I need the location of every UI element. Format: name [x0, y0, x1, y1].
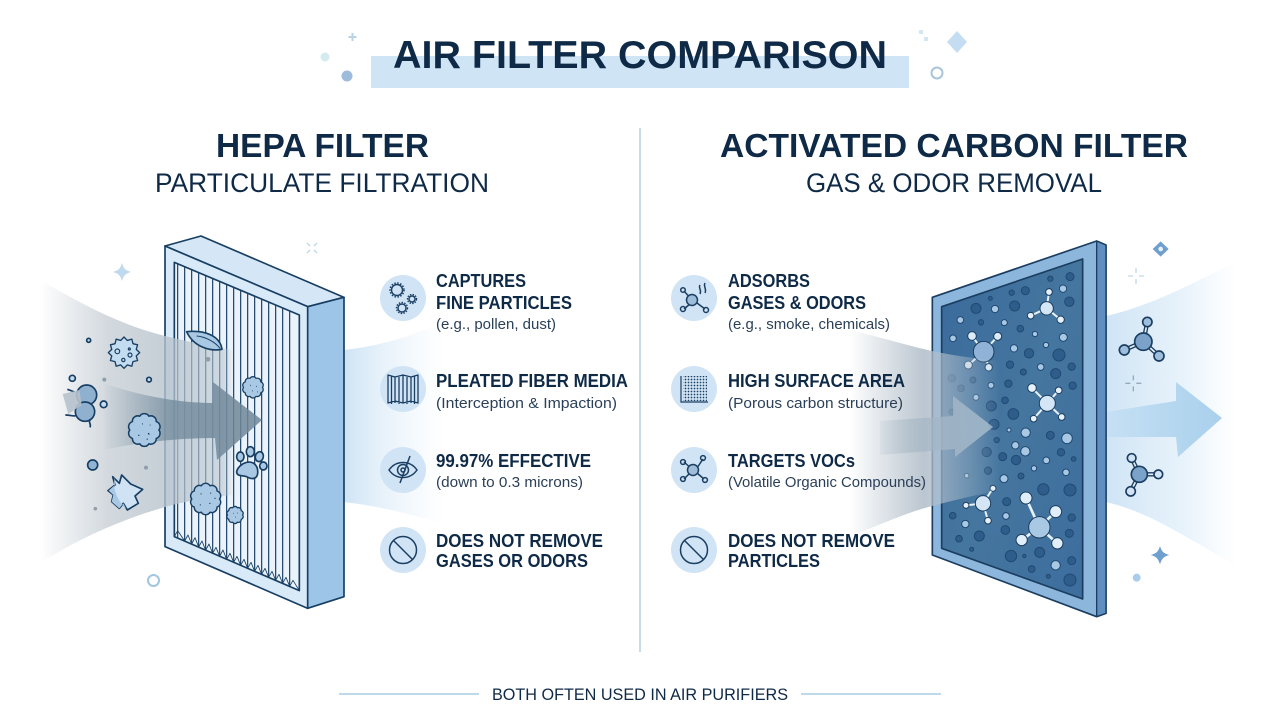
- left feature list: [380, 270, 628, 573]
- free molecules and sparkles: [1119, 241, 1169, 582]
- icon: small dots: [69, 338, 210, 510]
- left column heading: PARTICULATE FILTRATION: [155, 168, 489, 198]
- feature: captures fine particles: (e.g., pollen, dust): [436, 316, 556, 333]
- feature: adsorbs gases: (e.g., smoke, chemicals): [728, 316, 890, 333]
- feature: pleated fiber media: [380, 366, 628, 412]
- feature: high surface area: [671, 366, 905, 412]
- feature: adsorbs gases: ADSORBS: [728, 270, 810, 291]
- feature: pleated fiber media: PLEATED FIBER MEDIA: [436, 370, 628, 391]
- decorative sparkles: [1125, 241, 1169, 582]
- light pores: [950, 285, 1072, 570]
- feature: does not remove gases: DOES NOT REMOVE: [436, 530, 603, 551]
- feature: captures fine particles: FINE PARTICLES: [436, 292, 572, 313]
- feature: 99.97% effective: (down to 0.3 microns): [436, 474, 583, 491]
- title decorations: [320, 30, 967, 82]
- icon: dust speck: [227, 506, 243, 524]
- incoming air stream: [850, 330, 1000, 536]
- feature: does not remove particles: [671, 527, 895, 573]
- feature: pleated fiber media: (Interception & Impaction): [436, 395, 617, 412]
- feature: does not remove particles: DOES NOT REMOVE: [728, 530, 895, 551]
- icon: leaf: [187, 331, 222, 350]
- trapped molecules: [963, 289, 1065, 549]
- feature: high surface area: HIGH SURFACE AREA: [728, 370, 905, 391]
- left column heading: [155, 128, 489, 198]
- clean air outflow: [344, 320, 445, 525]
- feature: targets VOCs: (Volatile Organic Compounds): [728, 474, 926, 491]
- icon: dust cloud: [129, 414, 160, 446]
- feature: captures fine particles: [380, 270, 572, 333]
- title highlight bar: [371, 56, 909, 88]
- decorative sparkle and ring: [113, 243, 317, 586]
- icon: pollen grain: [108, 337, 140, 368]
- feature: targets VOCs: TARGETS VOCs: [728, 450, 855, 471]
- icon: mold clump: [63, 385, 97, 427]
- right column heading: [720, 128, 1188, 198]
- left column heading: HEPA FILTER: [216, 128, 429, 165]
- feature: adsorbs gases: [671, 270, 890, 333]
- feature: captures fine particles: CAPTURES: [436, 270, 526, 291]
- clean air outflow: [1106, 262, 1235, 565]
- center divider: [639, 128, 641, 652]
- icon: pet paw: [237, 447, 267, 479]
- flow arrow: [103, 382, 262, 460]
- feature: 99.97% effective: 99.97% EFFECTIVE: [436, 450, 591, 471]
- molecule: top: [1119, 317, 1164, 361]
- icon: fiber shard: [108, 475, 143, 510]
- feature: adsorbs gases: GASES & ODORS: [728, 292, 866, 313]
- right feature list: [671, 270, 926, 573]
- right column heading: GAS & ODOR REMOVAL: [806, 168, 1102, 198]
- icon: dust cloud lower: [191, 483, 221, 515]
- activated carbon illustration: [850, 241, 1235, 617]
- particles: [63, 331, 267, 524]
- carbon filter panel: [932, 241, 1106, 617]
- icon: trapped particle: [243, 377, 263, 398]
- right column heading: ACTIVATED CARBON FILTER: [720, 128, 1188, 165]
- title block: [320, 30, 967, 88]
- title: AIR FILTER COMPARISON: [393, 34, 887, 77]
- incoming arrow: [880, 396, 993, 457]
- clean air arrow: [1106, 382, 1222, 457]
- carbon pores: [948, 273, 1076, 586]
- air stream: [40, 280, 233, 563]
- feature: targets VOCs: [671, 447, 926, 493]
- feature: does not remove gases: [380, 527, 603, 573]
- feature: high surface area: (Porous carbon structure): [728, 395, 903, 412]
- footer note: BOTH OFTEN USED IN AIR PURIFIERS: [492, 686, 788, 704]
- HEPA illustration: [40, 236, 445, 608]
- feature: 99.97% effective: [380, 447, 591, 493]
- feature: does not remove gases: GASES OR ODORS: [436, 550, 588, 571]
- molecule: bottom: [1126, 454, 1163, 496]
- feature: does not remove particles: PARTICLES: [728, 550, 820, 571]
- HEPA filter frame: [165, 236, 344, 608]
